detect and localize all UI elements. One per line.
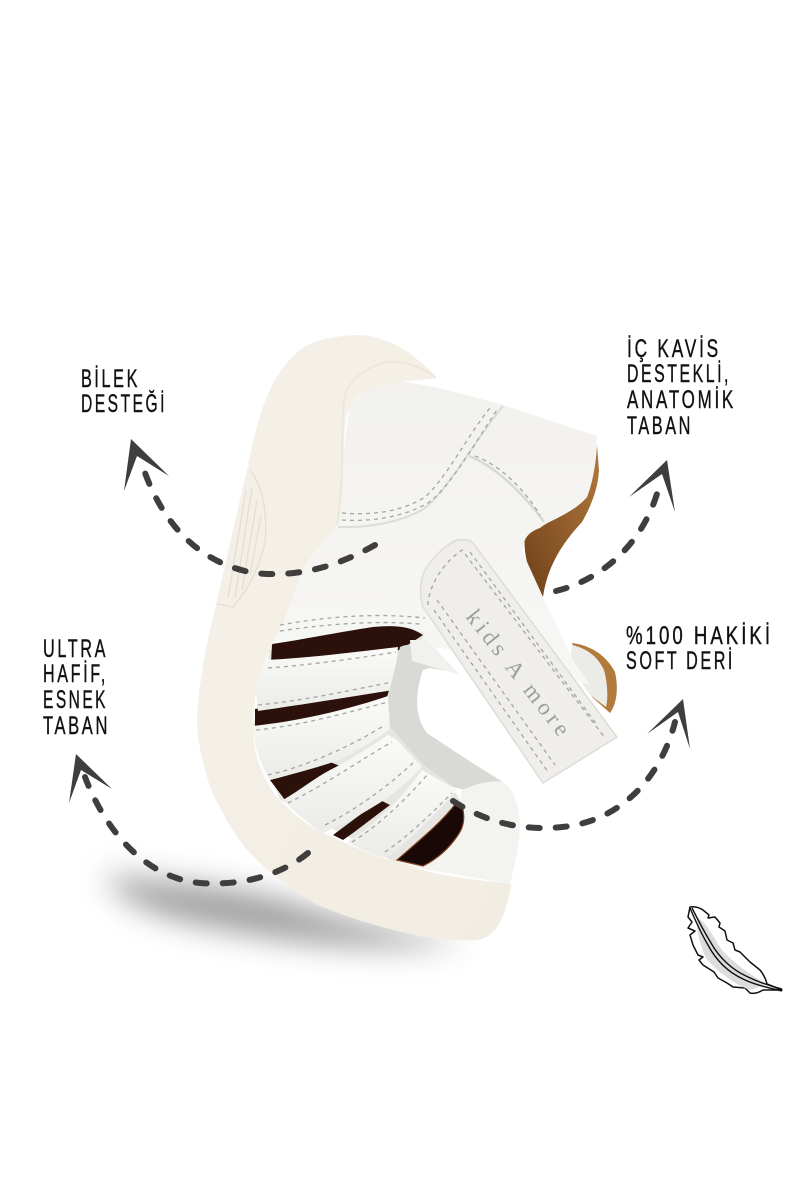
label: bilek destegi <box>81 364 167 418</box>
arrow: ankle <box>124 439 375 574</box>
arrow: leather <box>453 699 690 828</box>
label: bilek destegi: BİLEK <box>81 364 140 393</box>
sandal inner heel lining <box>524 445 599 597</box>
arrow: insole <box>556 460 675 591</box>
label: ic kavis: DESTEKLİ, <box>627 359 731 388</box>
arrow: sole <box>69 754 308 884</box>
label: ultra hafif <box>43 635 110 740</box>
label: hakiki deri <box>626 621 773 675</box>
label: ultra hafif: HAFİF, <box>43 659 108 688</box>
sandal upper seams <box>280 406 544 631</box>
label: bilek destegi: DESTEĞİ <box>81 389 167 418</box>
sandal far-side strap <box>570 643 617 713</box>
icon: feather <box>688 907 782 993</box>
sandal inner collar <box>388 645 503 792</box>
label: ic kavis: İÇ KAVİS <box>627 334 721 363</box>
product photo: white sandal <box>197 335 617 940</box>
sandal strap backing <box>252 632 465 870</box>
sandal velcro strap <box>421 540 617 783</box>
label: ic kavis <box>627 334 736 440</box>
label: ic kavis: TABAN <box>627 412 693 440</box>
sandal collar top piece <box>410 640 460 675</box>
sandal sole heel tread <box>218 470 266 607</box>
sandal toe cap <box>395 781 520 884</box>
sandal sole <box>197 335 511 940</box>
label: ultra hafif: ULTRA <box>43 635 108 663</box>
label: ic kavis: ANATOMİK <box>627 385 736 414</box>
sandal dark gaps <box>255 626 423 840</box>
sandal side straps <box>253 647 457 858</box>
sandal sole collar ridge <box>337 362 436 525</box>
sandal toe opening <box>397 802 464 866</box>
brand text: kids A more <box>461 605 575 741</box>
label: ultra hafif: TABAN <box>43 712 110 740</box>
label: ultra hafif: ESNEK <box>43 686 108 714</box>
sandal upper leather <box>270 381 597 685</box>
label: hakiki deri: SOFT DERİ <box>626 646 735 675</box>
ground shadow <box>105 875 465 947</box>
